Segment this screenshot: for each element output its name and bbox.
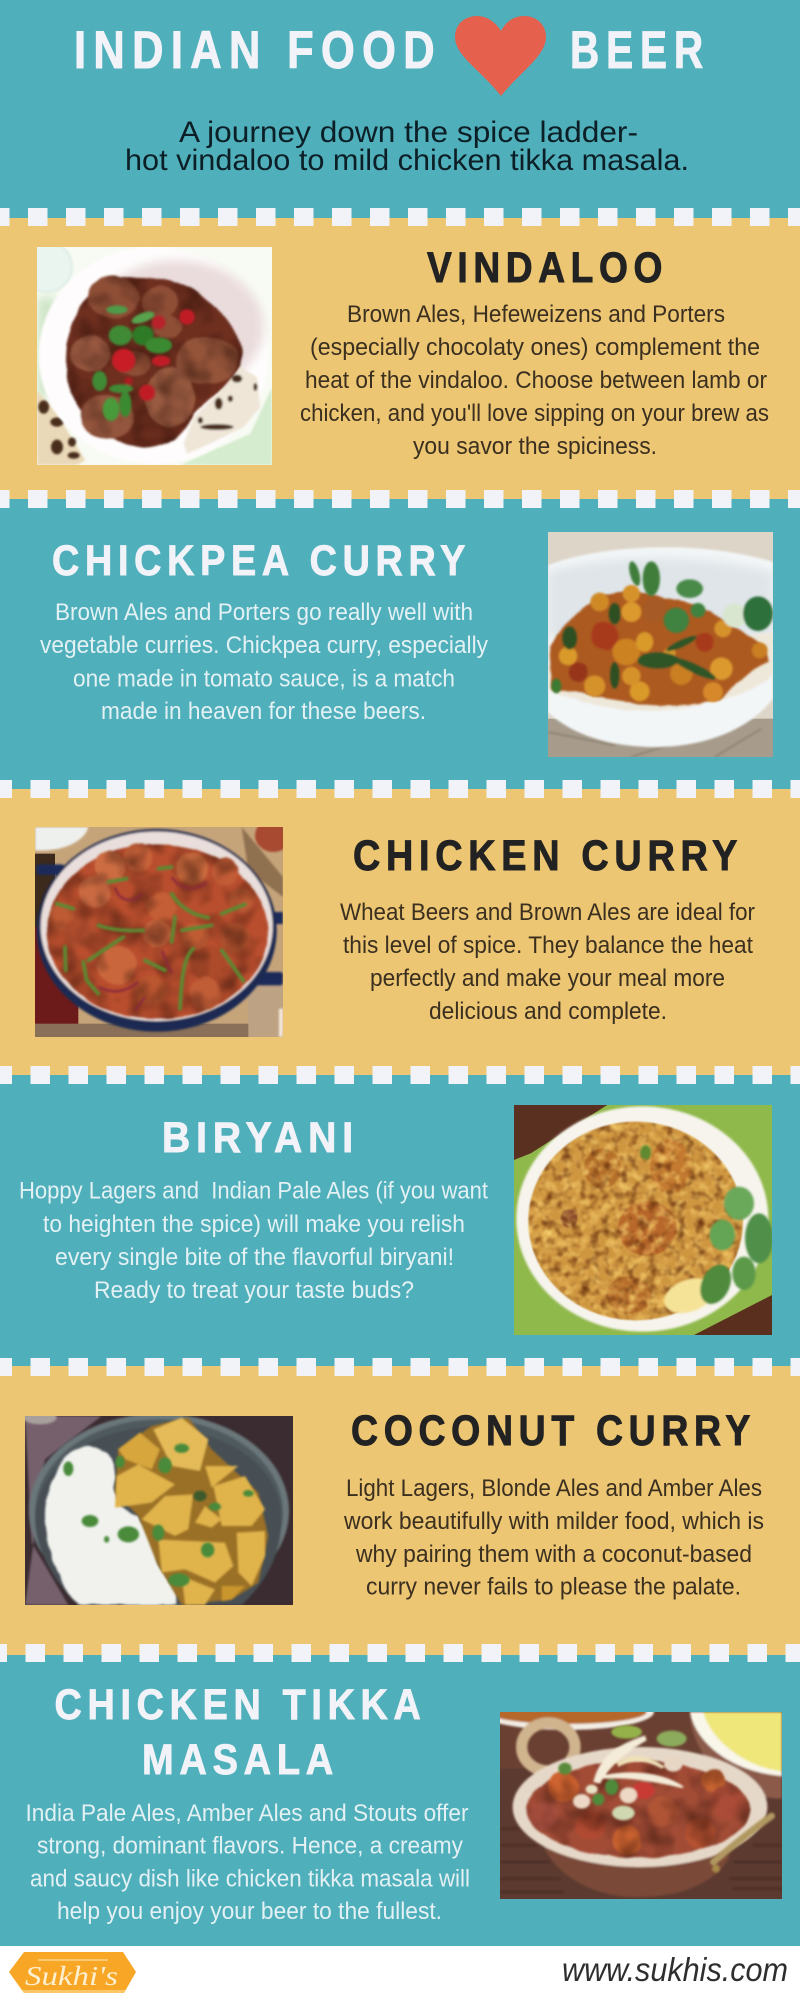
text block: to heighten the spice) will make you relish <box>43 1211 465 1238</box>
heading: CHICKPEA CURRY <box>52 537 471 585</box>
text block <box>340 899 755 1025</box>
divider strip <box>0 1644 800 1662</box>
text block: work beautifully with milder food, which is <box>343 1508 764 1535</box>
logo <box>9 1952 136 1993</box>
text block <box>300 301 769 460</box>
text block: curry never fails to please the palate. <box>366 1574 741 1600</box>
subtitle: A journey down the spice ladder- <box>179 116 638 149</box>
panel: biryani <box>0 1066 800 1366</box>
text block: Ready to treat your taste buds? <box>94 1277 414 1304</box>
text block <box>19 1178 488 1304</box>
divider strip <box>0 208 800 226</box>
title: BEER <box>570 21 710 80</box>
text block: perfectly and make your meal more <box>370 965 725 992</box>
heading: CHICKEN CURRY <box>353 832 743 880</box>
text block: one made in tomato sauce, is a match <box>73 666 455 692</box>
footer <box>0 1946 800 2000</box>
text block: (especially chocolaty ones) complement the <box>310 334 760 361</box>
divider strip <box>0 1358 800 1376</box>
title: INDIAN FOOD <box>74 21 442 80</box>
text block <box>40 599 488 725</box>
text block: chicken, and you'll love sipping on your brew as <box>300 400 769 427</box>
logo: Sukhi's <box>25 1961 118 1991</box>
text block: Hoppy Lagers and Indian Pale Ales (if you want <box>19 1178 488 1204</box>
text block: Brown Ales, Hefeweizens and Porters <box>347 301 725 328</box>
text block: made in heaven for these beers. <box>101 698 426 725</box>
icon: heart <box>455 16 546 96</box>
text block: Brown Ales and Porters go really well with <box>55 599 473 626</box>
divider strip <box>0 1066 800 1084</box>
subtitle: hot vindaloo to mild chicken tikka masala. <box>125 144 689 177</box>
text block <box>343 1475 764 1600</box>
panel: vindaloo <box>0 208 800 499</box>
panel: chicken tikka masala <box>0 1644 800 1946</box>
text block <box>26 1800 470 1925</box>
text block: heat of the vindaloo. Choose between lamb or <box>305 367 767 394</box>
photo: chicken curry <box>35 827 283 1037</box>
photo: chickpea curry <box>548 532 773 757</box>
panel: chickpea curry <box>0 490 800 789</box>
photo: biryani <box>514 1105 772 1335</box>
photo: vindaloo <box>37 247 272 465</box>
panel: coconut curry <box>0 1358 800 1655</box>
text block: you savor the spiciness. <box>413 433 657 460</box>
text block: and saucy dish like chicken tikka masala will <box>30 1866 470 1892</box>
heading: CHICKEN TIKKA <box>54 1681 426 1729</box>
text block: strong, dominant flavors. Hence, a creamy <box>37 1832 463 1860</box>
photo: chicken tikka masala <box>500 1712 782 1899</box>
text block: every single bite of the flavorful biryani! <box>55 1244 454 1271</box>
text block: India Pale Ales, Amber Ales and Stouts offer <box>26 1800 469 1827</box>
text block: Wheat Beers and Brown Ales are ideal for <box>340 899 755 926</box>
website: www.sukhis.com <box>562 1951 788 1988</box>
divider strip <box>0 490 800 508</box>
text block: Light Lagers, Blonde Ales and Amber Ales <box>346 1475 762 1502</box>
panel: header <box>0 0 800 218</box>
text block: vegetable curries. Chickpea curry, especially <box>40 632 488 659</box>
divider strip <box>0 780 800 798</box>
text block: why pairing them with a coconut-based <box>355 1541 752 1568</box>
heading: VINDALOO <box>427 244 668 292</box>
text block: delicious and complete. <box>429 998 667 1025</box>
heading: BIRYANI <box>162 1114 359 1162</box>
subtitle <box>125 116 689 177</box>
text block: help you enjoy your beer to the fullest. <box>57 1898 442 1925</box>
photo: coconut curry <box>25 1416 293 1605</box>
heading: MASALA <box>142 1736 339 1784</box>
text block: this level of spice. They balance the heat <box>343 932 753 959</box>
panel: chicken curry <box>0 780 800 1075</box>
heading <box>54 1681 426 1784</box>
